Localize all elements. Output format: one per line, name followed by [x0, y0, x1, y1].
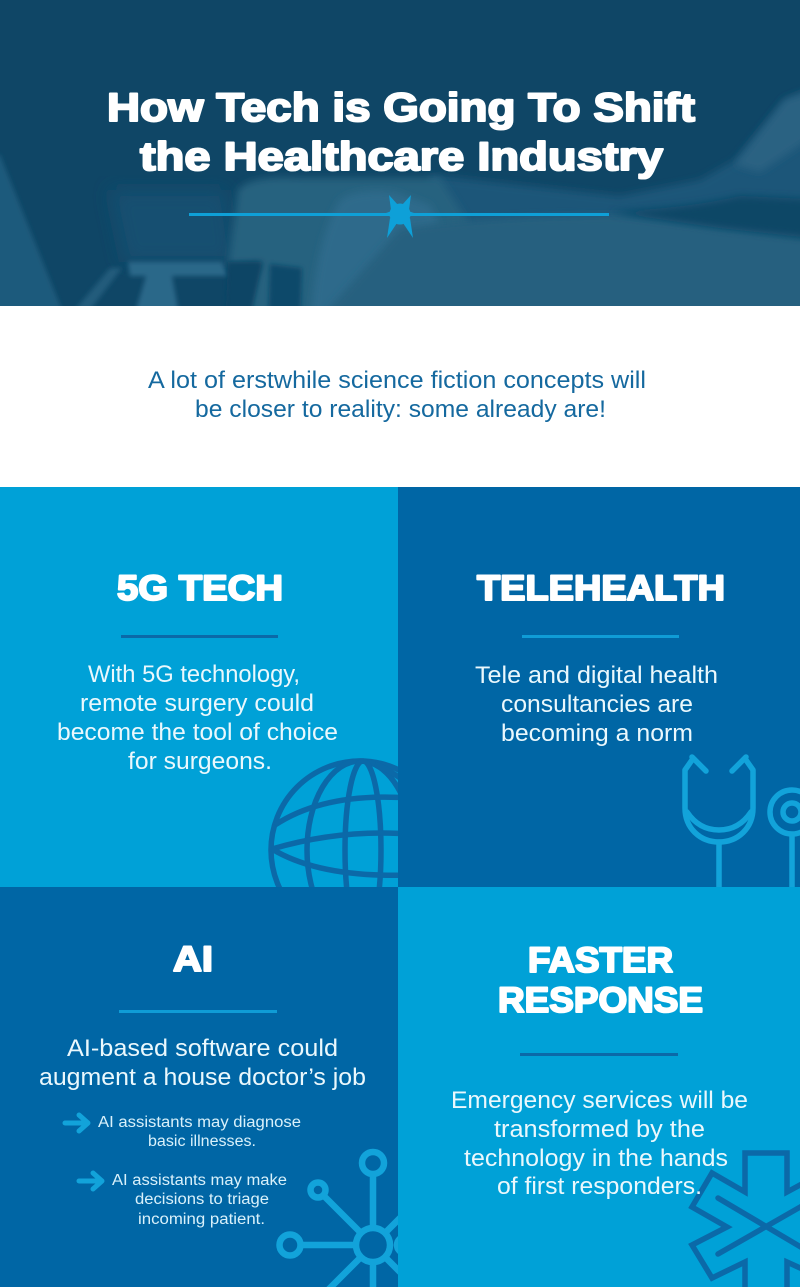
heading: AI: AI [173, 940, 213, 979]
body text: 5G: become the tool of choice [57, 719, 338, 746]
panel: AI [0, 887, 413, 1287]
body text: AI [39, 1035, 366, 1091]
intro text: A lot of erstwhile science fiction concepts will [148, 367, 646, 394]
intro text [148, 367, 646, 423]
intro text: be closer to reality: some already are! [195, 396, 606, 423]
body text: 5G [57, 661, 338, 775]
body text: faster response: transformed by the [494, 1116, 705, 1143]
body text: faster response: technology in the hands [464, 1145, 728, 1172]
bullet text 1 [98, 1114, 301, 1150]
icon: stethoscope [685, 757, 800, 890]
title [107, 86, 695, 179]
body text: faster response: Emergency services will be [451, 1087, 748, 1114]
heading: 5G tech: 5G TECH [117, 569, 283, 608]
icon: star of life [692, 1153, 800, 1287]
bullet text 1: basic illnesses. [148, 1133, 256, 1150]
body text: telehealth [475, 662, 718, 747]
body text: AI: augment a house doctor’s job [39, 1064, 366, 1091]
title: the Healthcare Industry [140, 135, 664, 179]
divider [522, 635, 679, 638]
body text: 5G: With 5G technology, [88, 661, 300, 688]
divider [121, 635, 278, 638]
body text: telehealth: becoming a norm [501, 720, 693, 747]
bullet text 2 [112, 1172, 287, 1228]
body text: faster response: of first responders. [497, 1173, 702, 1200]
icon: globe [268, 758, 398, 887]
body text: 5G: remote surgery could [80, 690, 314, 717]
icon: arrow 2 [79, 1173, 102, 1189]
bullet text 2: AI assistants may make [112, 1172, 287, 1189]
body text: 5G: for surgeons. [128, 748, 272, 775]
body text: telehealth: consultancies are [501, 691, 693, 718]
title divider with star [189, 195, 609, 238]
heading: faster response: RESPONSE [498, 981, 703, 1020]
bullet text 1: AI assistants may diagnose [98, 1114, 301, 1131]
icon: arrow 1 [65, 1115, 88, 1131]
body text: AI: AI-based software could [67, 1035, 338, 1062]
bullet text 2: incoming patient. [138, 1211, 265, 1228]
title: How Tech is Going To Shift [107, 86, 695, 130]
panel: telehealth [398, 487, 800, 890]
body text: faster response [451, 1087, 748, 1200]
hero banner with blurred photo of hands typing [0, 0, 800, 330]
panel: faster response [398, 887, 800, 1287]
icon: molecule network [280, 1152, 413, 1287]
heading: faster response: FASTER [528, 941, 673, 980]
bullet text 2: decisions to triage [135, 1191, 269, 1208]
divider [520, 1053, 678, 1056]
panel: 5G tech [0, 487, 398, 887]
heading: telehealth: TELEHEALTH [477, 569, 725, 608]
body text: telehealth: Tele and digital health [475, 662, 718, 689]
heading: faster response [498, 941, 703, 1020]
divider [119, 1010, 277, 1013]
